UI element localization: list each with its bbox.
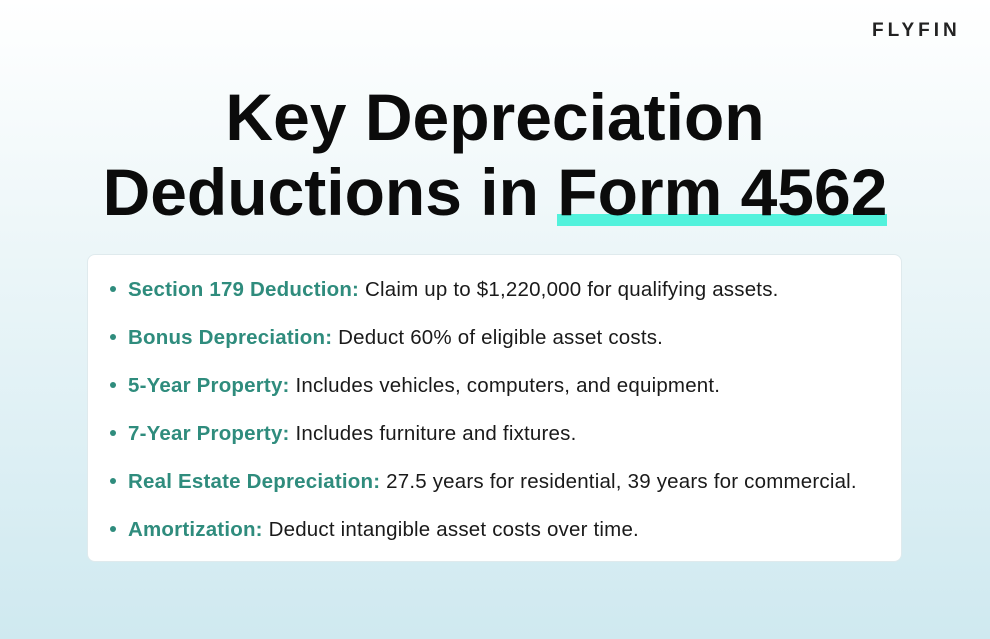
item: real estate: Real Estate Depreciation: 27.5 years for residential, 39 years for commercial. (128, 470, 857, 493)
item: 5-year: 5-Year Property: Includes vehicles, computers, and equipment. (128, 374, 720, 397)
item: amortization: Amortization: Deduct intangible asset costs over time. (128, 518, 639, 541)
logo: FLYFIN (872, 20, 961, 41)
item: 7-year: 7-Year Property: Includes furniture and fixtures. (128, 422, 576, 445)
title: Deductions in Form 4562 (103, 155, 887, 229)
item: bonus: Bonus Depreciation: Deduct 60% of eligible asset costs. (128, 326, 663, 349)
item: section 179: Section 179 Deduction: Claim up to $1,220,000 for qualifying assets. (128, 278, 779, 301)
panel: deductions list (87, 254, 902, 562)
title (103, 80, 887, 229)
title: Key Depreciation (225, 80, 765, 154)
